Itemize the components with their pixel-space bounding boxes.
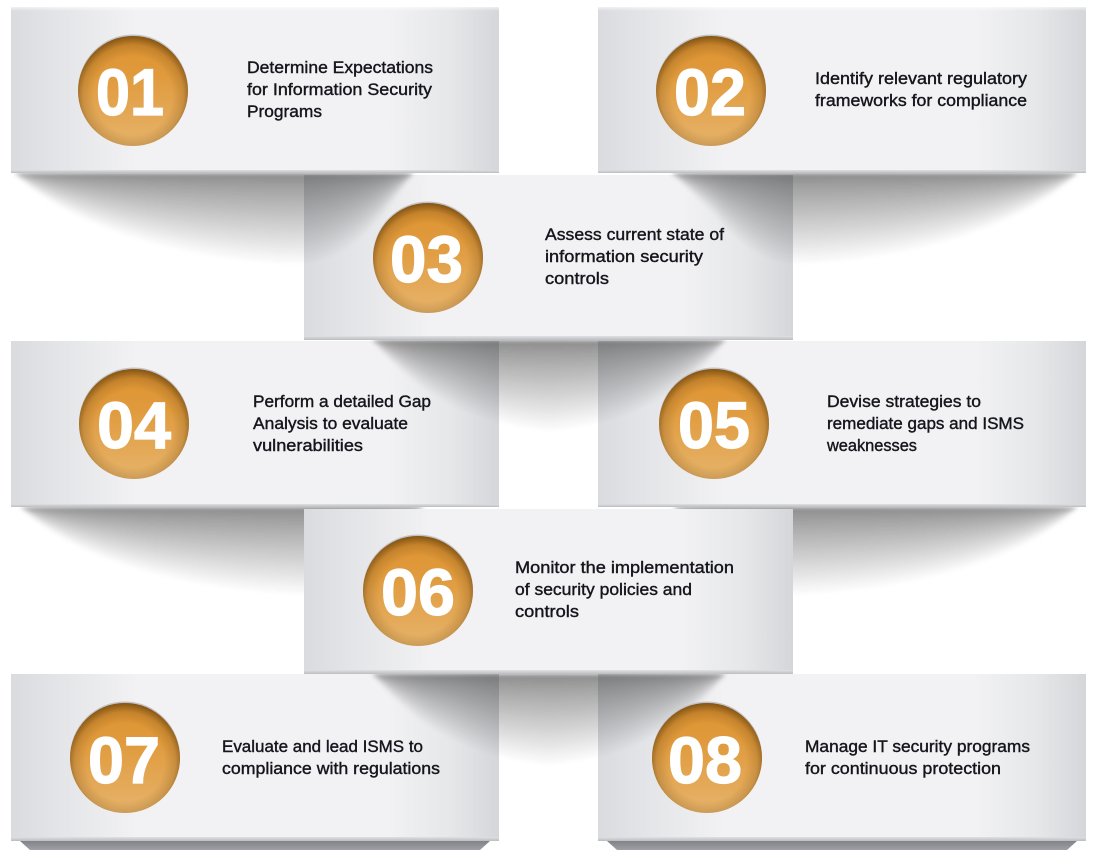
badge: 01: 01 [96, 55, 164, 129]
text: step 8 [805, 737, 1030, 778]
text: step 6 [515, 558, 734, 621]
text: step 4: vulnerabilities [253, 436, 363, 455]
shadow: below step 2 [671, 173, 1078, 262]
badge: 05 [659, 368, 769, 479]
shadow: below step 1 [14, 173, 414, 262]
badge: 06 [363, 534, 473, 646]
text: step 7 [222, 737, 440, 778]
text: step 5: remediate gaps and ISMS [827, 414, 1024, 433]
badge: 04: 04 [97, 388, 171, 462]
badge: 08 [652, 702, 762, 813]
badge: 05: 05 [678, 388, 750, 462]
text: step 3: information security [545, 247, 704, 266]
text: step 2: frameworks for compliance [815, 91, 1027, 110]
panel: step 8 card [598, 674, 1086, 841]
badge: 03: 03 [390, 222, 463, 296]
text: step 7: compliance with regulations [222, 759, 440, 778]
text: step 8: Manage IT security programs [805, 737, 1030, 756]
panel: step 4 card [11, 341, 499, 507]
text: step 1: Determine Expectations [247, 58, 433, 77]
text: step 8: for continuous protection [805, 759, 1001, 778]
panel: step 7 card [11, 674, 499, 841]
text: step 2: Identify relevant regulatory [815, 69, 1028, 88]
badge: 04 [79, 368, 189, 479]
text: step 1: Programs [247, 102, 322, 121]
shadow: below step 7 [20, 841, 490, 850]
text: step 5 [826, 392, 1024, 455]
shadow: below step 3 [372, 340, 726, 429]
badge: 06: 06 [381, 555, 455, 629]
text: step 4: Perform a detailed Gap [253, 392, 431, 411]
panel: step 6 card [304, 509, 793, 674]
text: step 6: Monitor the implementation [515, 558, 734, 577]
text: step 2 [815, 69, 1028, 110]
badge: 01 [78, 34, 188, 146]
shadow: below step 5 [673, 507, 1078, 593]
text: step 3: Assess current state of [545, 225, 724, 244]
panel: step 5 card [598, 341, 1086, 507]
text: step 6: controls [515, 602, 579, 621]
text: step 6: of security policies and [515, 580, 692, 599]
panel: step 2 card [598, 7, 1086, 173]
text: step 5: Devise strategies to [827, 392, 981, 411]
text: step 1: for Information Security [247, 80, 433, 99]
text: step 5: weaknesses [826, 436, 917, 455]
badge: 07: 07 [88, 723, 160, 797]
badge: 08: 08 [668, 723, 742, 797]
badge: 03 [373, 202, 483, 313]
shadow: below step 6 [372, 674, 726, 763]
text: step 1 [247, 58, 433, 121]
text: step 4: Analysis to evaluate [253, 414, 408, 433]
badge: 07 [70, 702, 180, 813]
shadow: below step 4 [20, 507, 424, 593]
badge: 02 [656, 34, 766, 146]
text: step 7: Evaluate and lead ISMS to [222, 737, 423, 756]
text: step 3 [545, 225, 724, 288]
panel: step 1 card [11, 7, 499, 173]
text: step 4 [253, 392, 431, 455]
panel: step 3 card [304, 175, 793, 340]
badge: 02: 02 [674, 55, 746, 129]
shadow: below step 8 [607, 841, 1077, 850]
text: step 3: controls [545, 269, 609, 288]
